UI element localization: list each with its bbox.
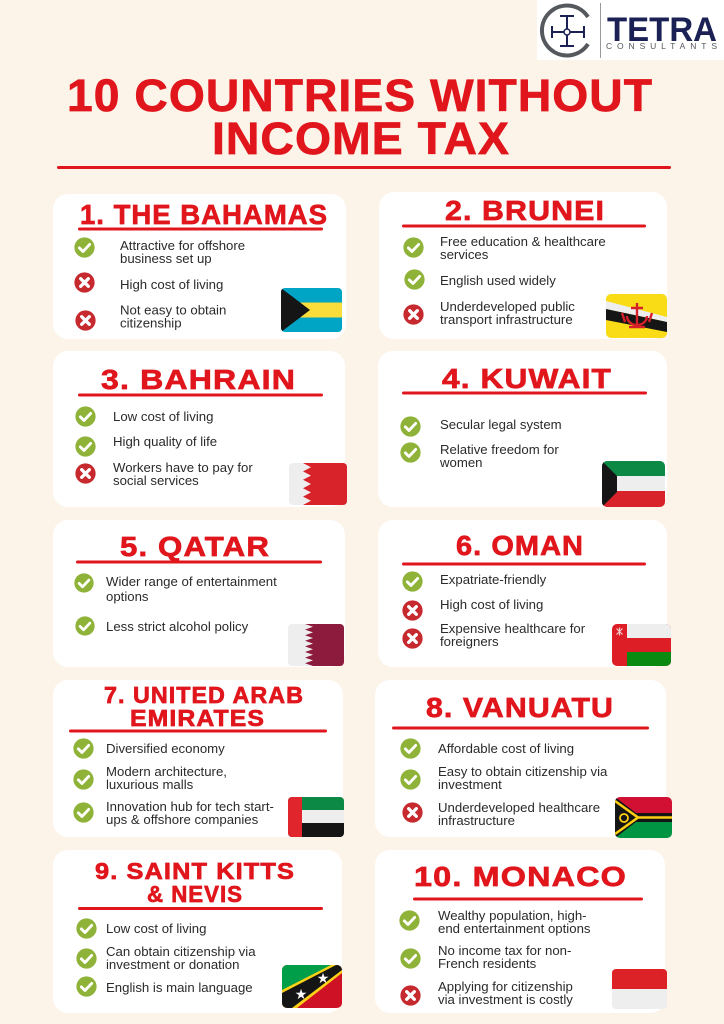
point: hub: Innovation hub for tech start- <box>106 799 274 814</box>
point: income tax <box>400 943 571 971</box>
point: wealth: end entertainment options <box>438 921 591 936</box>
point: economy <box>73 738 225 759</box>
point: English <box>404 269 556 290</box>
heading: United Arab Emirates: EMIRATES <box>130 705 265 731</box>
point: cost <box>402 597 543 621</box>
flag: Saint Kitts and Nevis <box>282 965 342 1008</box>
point: offshore: Attractive for offshore <box>120 238 245 253</box>
point: cost: Affordable cost of living <box>438 741 574 756</box>
point: transport: transport infrastructure <box>440 312 573 327</box>
point: citizenship: via investment is costly <box>438 992 573 1007</box>
point: expat <box>402 571 547 592</box>
point: architecture: Modern architecture, <box>106 764 227 779</box>
point: economy: Diversified economy <box>106 741 225 756</box>
heading: Qatar: 5. QATAR <box>120 531 270 562</box>
point: citizenship: Easy to obtain citizenship via <box>438 764 608 779</box>
point: education <box>403 234 606 262</box>
point: citizenship <box>75 302 226 331</box>
point: entertainment: Wider range of entertainment <box>106 574 277 589</box>
point: wealth: Wealthy population, high- <box>438 908 587 923</box>
point: legal: Secular legal system <box>440 417 562 432</box>
point: architecture <box>73 764 227 792</box>
point: education: Free education & healthcare <box>440 234 606 249</box>
point: citizenship: Not easy to obtain <box>120 302 226 318</box>
point: English: English is main language <box>106 980 253 995</box>
point: English: English used widely <box>440 273 556 288</box>
point: transport: Underdeveloped public <box>440 299 575 314</box>
point: offshore <box>74 237 245 266</box>
point: hub: ups & offshore companies <box>106 812 259 827</box>
heading: Monaco: 10. MONACO <box>414 861 627 892</box>
point: cost <box>76 918 206 939</box>
point: cost: Low cost of living <box>106 921 206 936</box>
heading: Saint Kitts & Nevis: 9. SAINT KITTS <box>95 858 295 884</box>
logo: Tetra Consultants: CONSULTANTS <box>606 41 717 51</box>
heading: Saint Kitts & Nevis <box>95 858 295 907</box>
title: INCOME TAX <box>212 113 510 164</box>
logo: Tetra Consultants <box>537 0 724 60</box>
point: income tax: French residents <box>438 956 537 971</box>
flag: Bahamas <box>281 288 342 332</box>
point: income tax: No income tax for non- <box>438 943 571 958</box>
title: 10 COUNTRIES WITHOUT <box>67 70 653 121</box>
panel: Kuwait <box>378 351 667 507</box>
logo: Tetra Consultants: TETRA <box>607 11 717 49</box>
point: healthcare: foreigners <box>440 634 499 649</box>
panel: Qatar <box>53 520 345 667</box>
point: citizenship: investment or donation <box>106 957 239 972</box>
point: cost: Low cost of living <box>113 409 213 424</box>
point: citizenship: citizenship <box>120 316 182 330</box>
point: social: social services <box>113 473 199 488</box>
point: entertainment <box>74 573 277 604</box>
point: social <box>75 460 253 488</box>
heading: Kuwait: 4. KUWAIT <box>442 363 612 394</box>
point: healthcare <box>402 800 600 828</box>
heading: United Arab Emirates <box>104 682 304 731</box>
point: alcohol <box>75 616 249 636</box>
panel: Bahrain <box>53 351 347 507</box>
point: expat: Expatriate-friendly <box>440 572 547 587</box>
point: citizenship: Applying for citizenship <box>438 979 573 994</box>
point: offshore: business set up <box>120 251 212 266</box>
heading: Brunei: 2. BRUNEI <box>445 195 605 226</box>
point: cost <box>74 272 223 293</box>
point: quality <box>75 434 217 457</box>
panel: Saint Kitts & Nevis <box>53 850 342 1013</box>
flag: Oman <box>612 624 671 666</box>
heading: Bahrain: 3. BAHRAIN <box>101 364 296 395</box>
point: wealth <box>399 908 591 936</box>
point: cost <box>400 738 574 759</box>
point: women: women <box>439 455 483 470</box>
point: education: services <box>440 247 489 262</box>
point: entertainment: options <box>106 589 149 604</box>
point: quality: High quality of life <box>113 434 217 449</box>
heading: United Arab Emirates: 7. UNITED ARAB <box>104 682 304 708</box>
point: hub <box>73 799 274 827</box>
heading: Vanuatu: 8. VANUATU <box>426 692 614 723</box>
flag: Monaco <box>612 969 667 1009</box>
point: healthcare <box>402 621 586 649</box>
point: transport <box>403 299 575 327</box>
point: alcohol: Less strict alcohol policy <box>106 619 249 634</box>
panel: The Bahamas <box>53 194 346 339</box>
flag: Saint Kitts and Nevis: ★ <box>295 987 307 1003</box>
panel: Monaco <box>375 850 667 1013</box>
point: citizenship <box>400 764 608 792</box>
panel: United Arab Emirates <box>53 680 344 837</box>
point: women: Relative freedom for <box>440 442 559 457</box>
point: social: Workers have to pay for <box>113 460 253 475</box>
point: cost <box>75 406 213 427</box>
flag: Bahrain <box>289 463 347 505</box>
point: women <box>400 442 559 470</box>
heading: Saint Kitts & Nevis: & NEVIS <box>147 881 243 907</box>
flag: Brunei <box>606 294 667 338</box>
title <box>67 70 653 164</box>
point: citizenship: investment <box>438 777 502 792</box>
point: cost: High cost of living <box>120 277 223 292</box>
flag: Vanuatu <box>615 797 672 838</box>
point: cost: High cost of living <box>440 597 543 612</box>
panel: Vanuatu <box>375 680 672 838</box>
flag: Saint Kitts and Nevis: ★ <box>317 971 329 987</box>
point: citizenship <box>400 979 573 1007</box>
heading: Oman: 6. OMAN <box>456 530 584 561</box>
panel: Oman <box>378 520 671 667</box>
point: legal <box>400 416 562 437</box>
flag: Qatar <box>288 624 344 666</box>
point: English <box>76 976 253 997</box>
flag: UAE <box>288 797 344 837</box>
panel: Brunei <box>379 192 667 339</box>
point: citizenship <box>76 944 256 972</box>
flag: Kuwait <box>602 461 665 507</box>
point: healthcare: Underdeveloped healthcare <box>438 800 600 815</box>
heading: The Bahamas: 1. THE BAHAMAS <box>80 199 328 230</box>
point: healthcare: infrastructure <box>438 813 515 828</box>
point: architecture: luxurious malls <box>106 777 194 792</box>
point: citizenship: Can obtain citizenship via <box>106 944 256 959</box>
point: healthcare: Expensive healthcare for <box>440 621 586 636</box>
